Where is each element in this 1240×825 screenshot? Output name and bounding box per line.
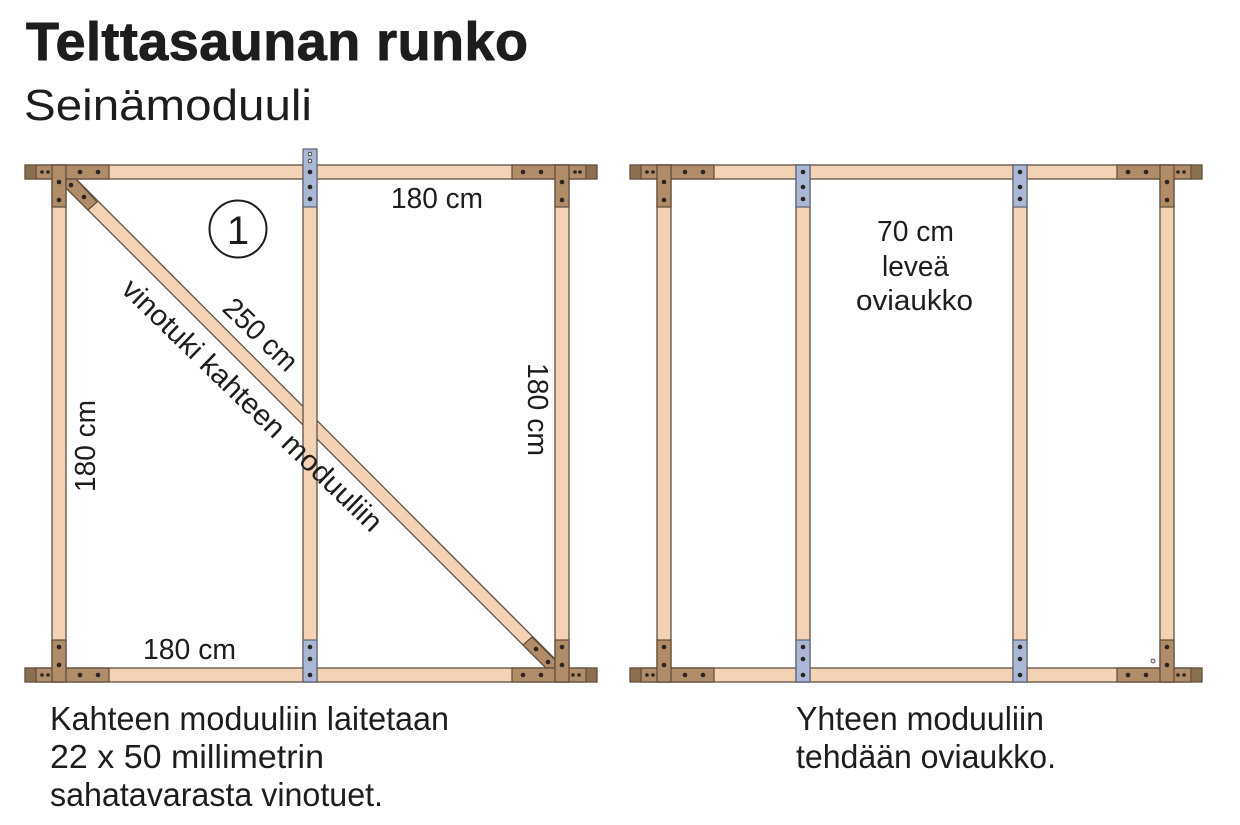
caption: right module: Yhteen moduuliin bbox=[796, 700, 1044, 737]
bottom rail bbox=[630, 668, 1202, 682]
subtitle: Seinämoduuli bbox=[24, 81, 312, 130]
bottom left corner bracket bbox=[25, 640, 109, 682]
diagonal brace bbox=[66, 179, 555, 668]
bottom middle metal plate bbox=[303, 640, 317, 682]
top left corner bracket bbox=[25, 165, 109, 210]
bottom right corner bracket bbox=[1117, 640, 1202, 682]
bottom right corner bracket bbox=[512, 637, 597, 682]
left post bbox=[657, 165, 671, 682]
top right corner bracket bbox=[512, 165, 597, 207]
top rail bbox=[630, 165, 1202, 179]
middle post bbox=[303, 165, 317, 682]
caption: right module bbox=[796, 700, 1056, 775]
caption: left module: 22 x 50 millimetrin bbox=[50, 738, 324, 775]
label: door opening width: oviaukko bbox=[856, 285, 973, 317]
bottom metal plates bbox=[796, 640, 1027, 682]
label: 250 cm: 250 cm bbox=[216, 292, 304, 378]
top middle metal plate bbox=[303, 149, 317, 207]
caption: left module: sahatavarasta vinotuet. bbox=[50, 776, 383, 813]
top right corner bracket bbox=[1117, 165, 1202, 207]
right post bbox=[555, 165, 569, 682]
top metal plates bbox=[796, 165, 1027, 207]
title: Telttasaunan runko bbox=[26, 12, 528, 72]
label: bottom 180 cm: 180 cm bbox=[143, 634, 236, 666]
frame: left wall module with diagonal brace bbox=[25, 149, 597, 682]
right post bbox=[1160, 165, 1174, 682]
step number 1 bbox=[210, 200, 266, 258]
label: door opening width: 70 cm bbox=[877, 216, 954, 248]
label: door opening width: leveä bbox=[882, 251, 950, 283]
label: diagonal brace note: vinotuki kahteen moduuliin bbox=[115, 273, 388, 538]
label: right 180 cm: 180 cm bbox=[521, 363, 553, 456]
label: top 180 cm: 180 cm bbox=[391, 183, 483, 215]
step number 1: 1 bbox=[227, 209, 249, 253]
top left corner bracket bbox=[630, 165, 714, 207]
label: left 180 cm: 180 cm bbox=[70, 400, 102, 492]
caption: left module bbox=[50, 700, 449, 813]
label: door opening width bbox=[856, 216, 973, 317]
top rail bbox=[25, 165, 597, 179]
bottom rail bbox=[25, 668, 597, 682]
caption: left module: Kahteen moduuliin laitetaan bbox=[50, 700, 449, 737]
frame: right wall module with door opening bbox=[630, 165, 1202, 682]
door post left bbox=[796, 165, 810, 682]
left post bbox=[52, 165, 66, 682]
door post right bbox=[1013, 165, 1027, 682]
caption: right module: tehdään oviaukko. bbox=[796, 738, 1056, 775]
bottom left corner bracket bbox=[630, 640, 714, 682]
